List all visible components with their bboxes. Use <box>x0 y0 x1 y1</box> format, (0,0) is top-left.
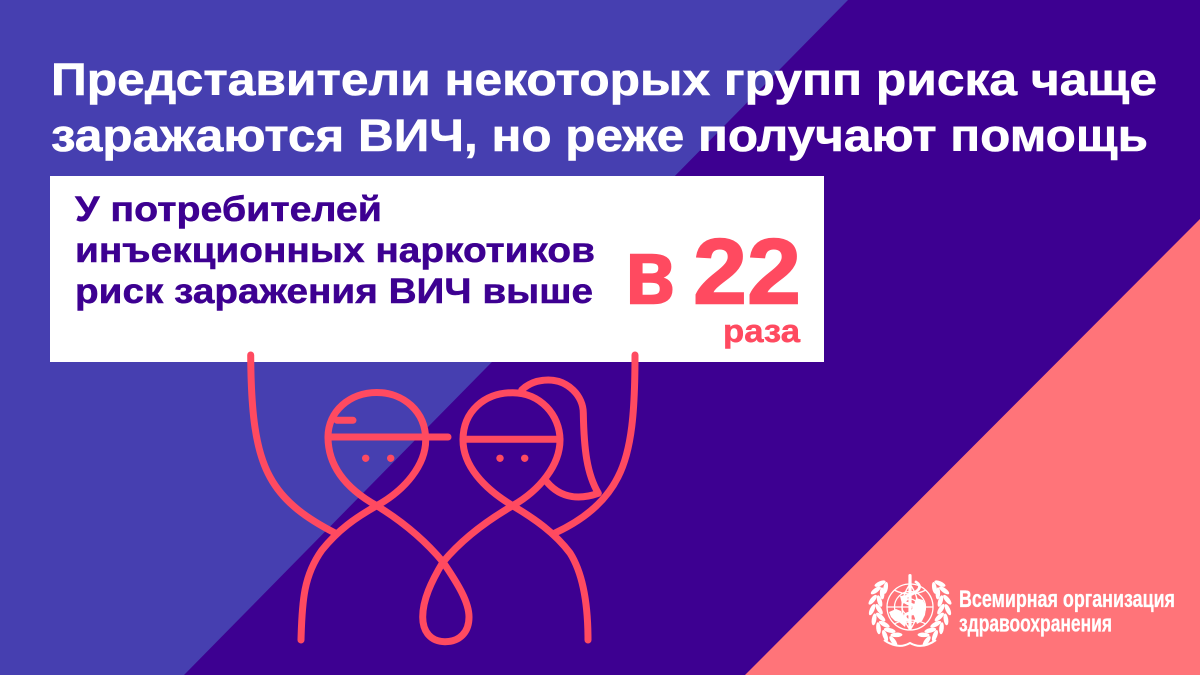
title: заражаются ВИЧ, но реже получают помощь <box>51 110 1148 161</box>
big number: 22 times <box>625 220 801 349</box>
title <box>51 54 1157 161</box>
background: coral triangle <box>745 219 1200 675</box>
cap visor <box>328 434 448 440</box>
ponytail <box>522 380 598 497</box>
illustration: two people holding the sign <box>251 355 635 642</box>
laurel right <box>916 576 953 648</box>
panel: white sign <box>50 176 824 362</box>
sign text: risk description <box>75 190 595 311</box>
continents <box>889 595 926 627</box>
logo: WHO emblem <box>867 574 953 648</box>
left arm <box>251 355 335 533</box>
sign text: risk description: инъекционных наркотиков <box>75 231 595 270</box>
background: blue triangle <box>0 0 848 675</box>
eyes <box>362 455 528 462</box>
snake <box>904 582 920 621</box>
hair strand <box>337 417 353 424</box>
staff <box>908 574 912 630</box>
big number: 22 times: в <box>625 220 675 324</box>
sign text: risk description: риск заражения ВИЧ выше <box>75 272 593 311</box>
logo text: здравоохранения <box>959 610 1112 638</box>
headband <box>463 436 560 443</box>
laurel left <box>867 576 904 648</box>
right arm <box>555 355 635 533</box>
big number: 22 times: 22 <box>693 220 801 324</box>
logo text <box>959 586 1175 638</box>
unit label: times: раза <box>723 313 800 349</box>
left person: head and body line to the loop <box>301 392 588 642</box>
sign text: risk description: У потребителей <box>75 190 382 229</box>
title: Представители некоторых групп риска чаще <box>51 54 1157 105</box>
